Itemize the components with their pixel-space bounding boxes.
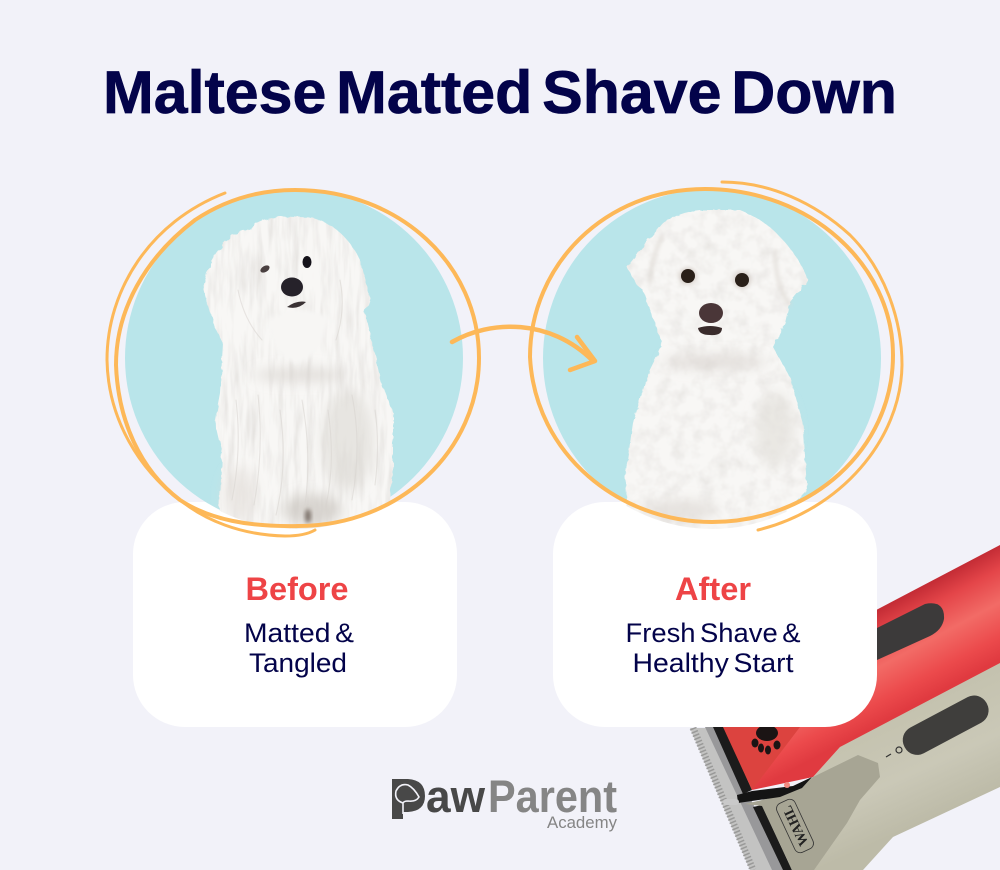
logo parent word: Parent xyxy=(488,771,617,822)
clipper beige grip xyxy=(898,691,994,760)
dark tuft xyxy=(305,509,311,523)
clipper blade plate xyxy=(705,727,785,870)
description: before: Matted & xyxy=(244,618,354,648)
clipper black stripes xyxy=(713,727,792,870)
title: Maltese Matted Shave Down xyxy=(103,59,897,126)
arrow: before to after xyxy=(452,327,595,370)
beard xyxy=(273,312,324,358)
panel: before card xyxy=(133,502,457,727)
clipper beige body xyxy=(762,640,1000,870)
logo xyxy=(392,771,617,832)
clipper red grip xyxy=(877,603,944,660)
after ring scribble xyxy=(530,182,902,530)
description: after: Healthy Start xyxy=(632,648,794,678)
icon: matted dog xyxy=(203,217,393,535)
panel: after card xyxy=(553,502,877,727)
clipper red body xyxy=(752,545,1000,790)
logo paw word: aw xyxy=(426,771,486,822)
icon: paw print xyxy=(752,725,780,754)
mouth xyxy=(287,302,306,308)
fur shading xyxy=(224,368,374,526)
clipper brand label xyxy=(775,797,815,855)
fur strands xyxy=(232,280,378,515)
clipper brand label: WAHL xyxy=(781,803,812,848)
nose xyxy=(699,303,723,323)
clipper switch mark xyxy=(886,747,902,757)
clipper face plate xyxy=(745,755,880,870)
before circle background xyxy=(125,189,463,527)
mouth xyxy=(698,326,722,335)
after circle background xyxy=(543,189,881,527)
nose xyxy=(281,278,303,296)
eyes xyxy=(679,267,751,289)
fur shading xyxy=(642,355,795,520)
clipper head xyxy=(723,727,810,790)
clipper blade teeth xyxy=(690,728,773,870)
heading: after: After xyxy=(675,571,751,607)
clipper black collar xyxy=(737,777,812,803)
description: after: Fresh Shave & xyxy=(626,618,800,648)
clipper collar stub xyxy=(723,799,739,805)
icon: shaved dog xyxy=(625,210,808,535)
logo icon P with dog xyxy=(392,779,425,819)
icon: hair clipper xyxy=(690,545,1000,870)
eyes xyxy=(259,256,312,274)
logo academy word: Academy xyxy=(547,813,617,832)
ear shading xyxy=(650,235,790,305)
heading: before: Before xyxy=(246,571,348,607)
before ring scribble xyxy=(107,190,479,536)
clipper screw xyxy=(784,782,790,788)
description: before: Tangled xyxy=(249,648,347,678)
